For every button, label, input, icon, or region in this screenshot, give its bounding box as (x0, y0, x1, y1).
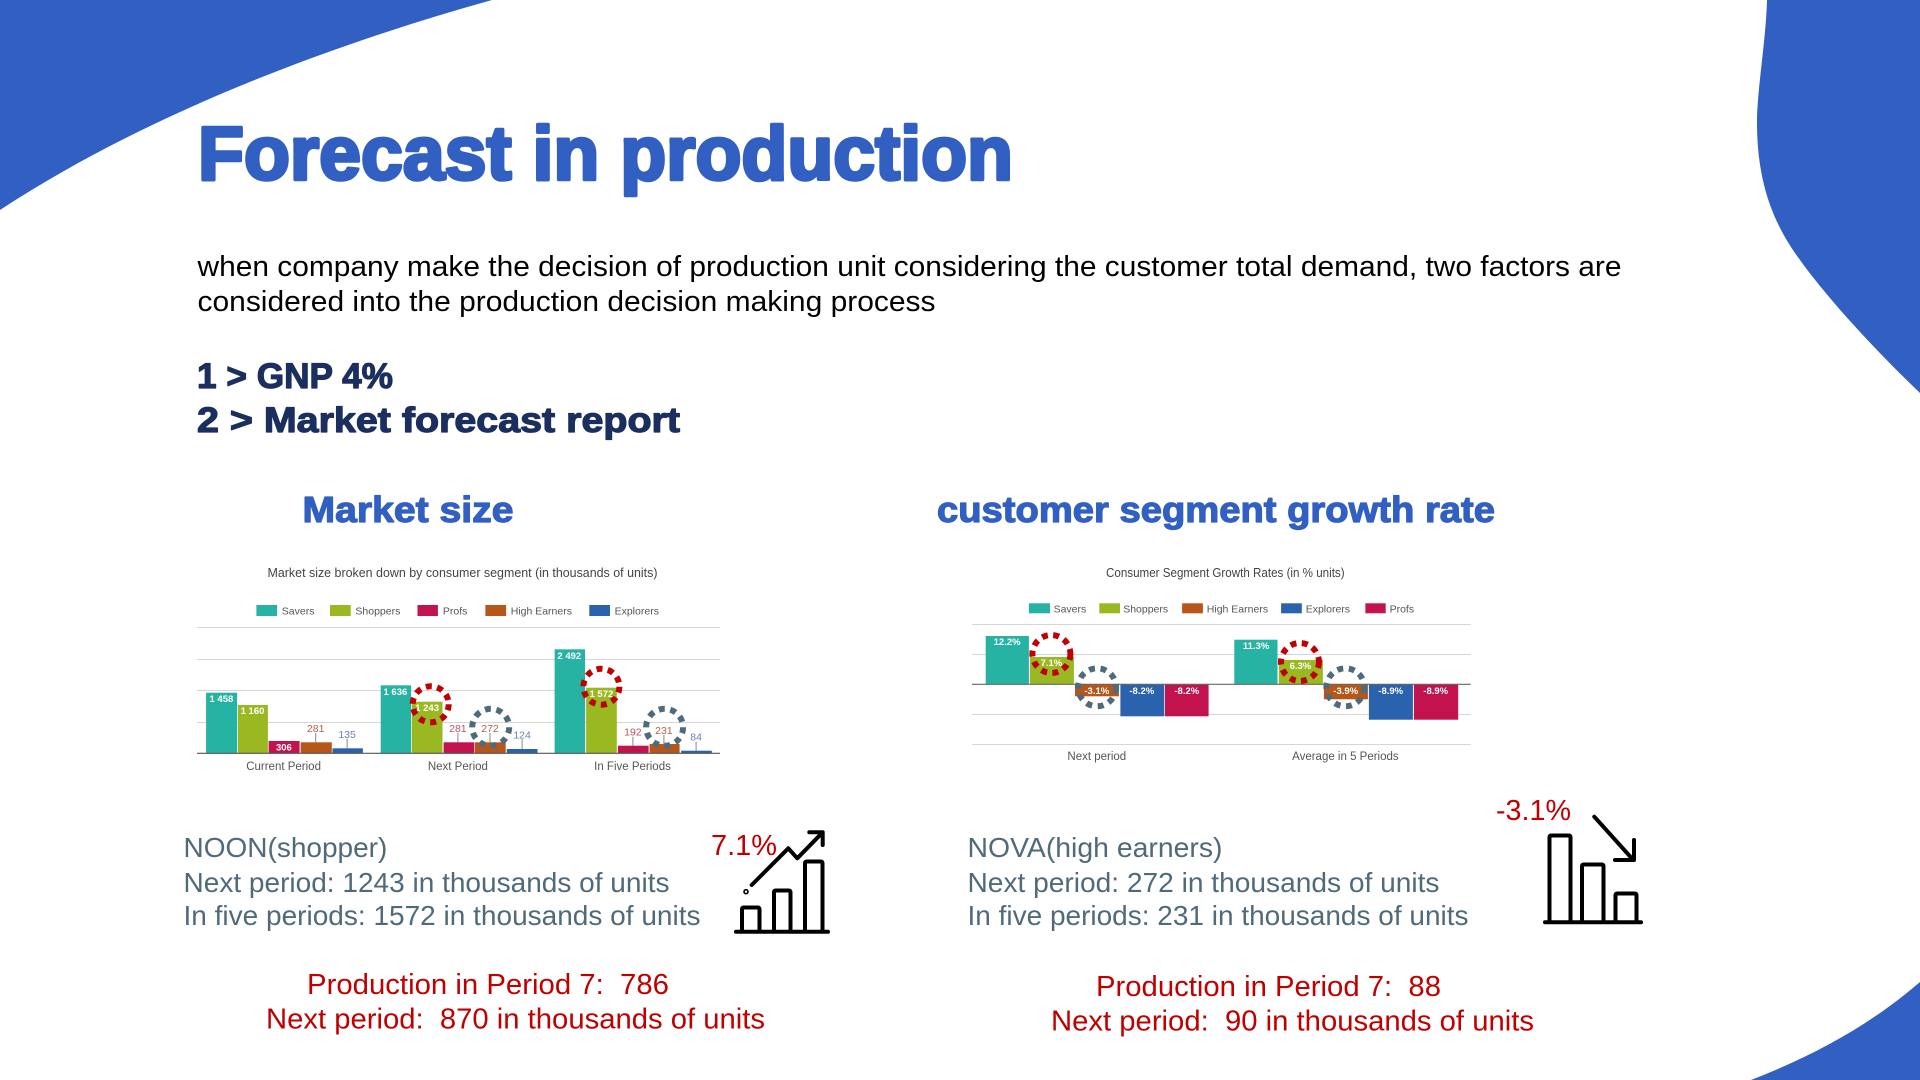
bars: next period: 1 243 (415, 703, 439, 714)
title: Forecast in production (198, 112, 1013, 196)
bars: average in 5 periods: 11.3% (1243, 641, 1270, 652)
legend: Explorers (1306, 604, 1350, 616)
chart title: Market size broken down by consumer segment (in thousands of units) (268, 565, 658, 580)
factor list: 2 > Market forecast report (197, 401, 680, 440)
legend: Savers (282, 606, 314, 618)
category labels: In Five Periods (594, 761, 671, 773)
highlight: shoppers next period (1032, 635, 1070, 673)
highlight: shoppers average (1281, 643, 1319, 681)
text block: NOON shopper forecast: NOON(shopper) (184, 832, 387, 863)
bars: next period: -8.2% (1129, 686, 1155, 697)
category labels: Current Period (246, 761, 321, 773)
bars: average in 5 periods: -8.9% (1378, 686, 1404, 697)
bars: current period: 1 458 (210, 694, 233, 705)
legend: Shoppers (1123, 604, 1168, 616)
bars: current period: 281 (307, 723, 325, 735)
highlight: shoppers next period (413, 686, 449, 722)
highlight: high earners next period (472, 709, 509, 746)
bars: next period: -3.1% (1084, 686, 1110, 697)
highlight: high earners average (1326, 668, 1364, 706)
chart: consumer segment growth rates (972, 565, 1471, 763)
category labels (246, 761, 671, 773)
bars: average in 5 periods: 6.3% (1290, 661, 1312, 672)
text block: NOON shopper forecast: In five periods: 1572 in thousands of units (184, 900, 700, 931)
decorative blob: top left (0, 0, 492, 210)
text block: NOON shopper forecast: Next period: 1243 in thousands of units (184, 867, 670, 898)
heading: market size: Market size (302, 489, 514, 530)
bars: in five periods: 1 572 (590, 689, 613, 700)
legend: Explorers (615, 606, 659, 618)
highlight: high earners in five periods (646, 709, 683, 746)
heading: customer segment growth rate: customer segment growth rate (937, 489, 1495, 530)
text block: NOVA production decision: Next period: 90 in thousands of units (1051, 1006, 1534, 1038)
growth value: -3.1%: -3.1% (1496, 795, 1571, 827)
intro text (196, 251, 1621, 318)
bars: average in 5 periods (1234, 640, 1458, 720)
text block: NOVA high earners forecast: NOVA(high earners) (968, 832, 1222, 863)
bars: in five periods: 84 (690, 732, 702, 744)
bars: next period: 1 636 (384, 687, 407, 698)
bars: in five periods (555, 649, 712, 753)
bars: average in 5 periods: -3.9% (1333, 686, 1359, 697)
decorative blob: bottom right (1751, 982, 1920, 1080)
text block: NOON production decision (266, 969, 765, 1036)
text block: NOON production decision: Next period: 870 in thousands of units (266, 1004, 765, 1036)
legend (1029, 603, 1414, 616)
text block: NOON production decision: Production in Period 7: 786 (307, 969, 669, 1001)
legend: High Earners (1207, 604, 1268, 616)
bars: next period: 272 (481, 723, 499, 735)
legend: Shoppers (355, 606, 400, 618)
icon: falling bar chart (1545, 817, 1641, 922)
bars: in five periods: 2 492 (557, 651, 581, 662)
bars: next period: 124 (513, 730, 531, 742)
bars: next period: 281 (449, 723, 467, 735)
legend (256, 605, 659, 618)
bars: current period: 306 (276, 742, 292, 754)
decorative blob: top right (1757, 0, 1920, 393)
text block: NOVA high earners forecast: Next period: 272 in thousands of units (968, 867, 1440, 898)
legend: High Earners (511, 606, 572, 618)
category labels: Next Period (428, 761, 488, 773)
intro text: when company make the decision of production unit considering the customer total demand, two factors are (196, 251, 1621, 283)
text block: NOVA high earners forecast (968, 832, 1468, 931)
bars: next period: -8.2% (1174, 686, 1200, 697)
highlight: shoppers in five periods (583, 669, 619, 705)
bars: next period (986, 636, 1209, 716)
legend: Savers (1054, 604, 1086, 616)
text block: NOVA production decision: Production in Period 7: 88 (1096, 971, 1441, 1003)
bars: next period: 7.1% (1041, 658, 1063, 669)
bars: average in 5 periods: -8.9% (1423, 686, 1449, 697)
highlight: high earners next period (1078, 668, 1116, 706)
bars: next period: 12.2% (994, 637, 1021, 648)
legend: Profs (1390, 604, 1414, 616)
bars: current period: 135 (338, 729, 356, 741)
category labels: Average in 5 Periods (1292, 751, 1399, 763)
intro text: considered into the production decision making process (198, 286, 936, 318)
chart: market size by segment (197, 565, 720, 773)
category labels: Next period (1067, 751, 1126, 763)
bars: current period (206, 693, 363, 754)
text block: NOON shopper forecast (184, 832, 700, 931)
icon: rising bar chart (736, 832, 828, 932)
bars: in five periods: 231 (655, 725, 673, 737)
text block: NOVA high earners forecast: In five periods: 231 in thousands of units (968, 900, 1468, 931)
factor list (197, 357, 680, 440)
bars: current period: 1 160 (241, 706, 264, 717)
legend: Profs (443, 606, 467, 618)
growth value: 7.1%: 7.1% (711, 830, 777, 862)
factor list: 1 > GNP 4% (197, 357, 393, 396)
text block: NOVA production decision (1051, 971, 1534, 1038)
bars: next period (381, 685, 538, 753)
chart title: Consumer Segment Growth Rates (in % units) (1106, 565, 1345, 580)
bars: in five periods: 192 (624, 726, 642, 738)
category labels (1067, 751, 1399, 763)
